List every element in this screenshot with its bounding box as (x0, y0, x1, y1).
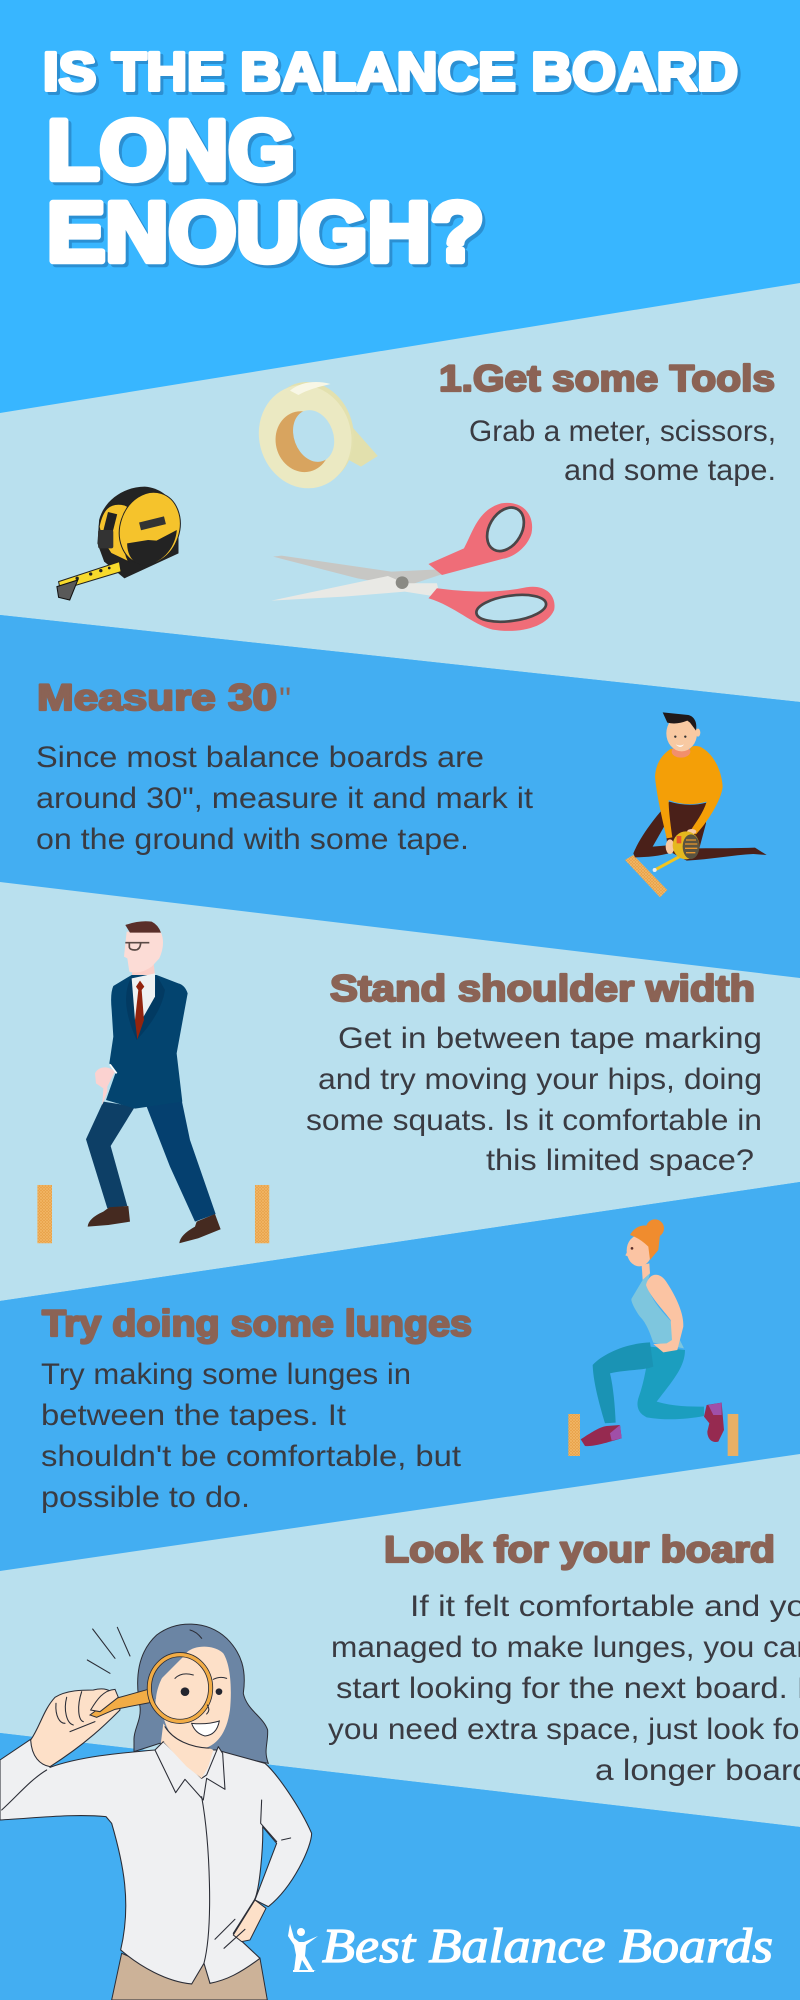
text: measure 30 (36, 741, 534, 856)
illustration: man measuring (625, 712, 767, 897)
text: get some tools: and some tape. (564, 454, 776, 487)
heading: get some tools: 1.Get some Tools (439, 358, 775, 399)
text: measure 30: on the ground with some tape. (36, 823, 469, 856)
panel: stand shoulder width (0, 882, 800, 1301)
illustration: woman with magnifying glass (0, 1624, 312, 2000)
text: try doing some lunges: shouldn't be comfortable, but (41, 1440, 462, 1473)
icon: tape measure (57, 484, 190, 600)
heading: measure 30: Measure 30 (37, 677, 277, 718)
heading: try doing some lunges: Try doing some lunges (42, 1303, 472, 1344)
text: stand shoulder width (306, 1022, 762, 1177)
text: stand shoulder width: some squats. Is it comfortable in (306, 1104, 762, 1137)
text: stand shoulder width: and try moving your hips, doing (318, 1063, 762, 1096)
text: try doing some lunges: possible to do. (41, 1481, 250, 1514)
heading: stand shoulder width: Stand shoulder width (330, 968, 755, 1009)
text: look for your board: you need extra space, just look for (328, 1713, 800, 1746)
text: look for your board: If it felt comfortable and you (410, 1590, 800, 1623)
icon: tape roll (248, 374, 378, 498)
text: look for your board: managed to make lunges, you can (331, 1631, 800, 1664)
heading: measure 30: " (279, 681, 291, 719)
text: look for your board (328, 1590, 800, 1787)
panel: measure 30 (0, 615, 800, 978)
text: look for your board: start looking for the next board. If (336, 1672, 800, 1705)
text: stand shoulder width: Get in between tape marking (338, 1022, 762, 1055)
text: look for your board: a longer board. (595, 1754, 800, 1787)
logo: Best Balance Boards: Best Balance Boards (322, 1918, 773, 1973)
text: try doing some lunges (41, 1358, 462, 1514)
text: try doing some lunges: between the tapes. It (41, 1399, 347, 1432)
panel: footer (0, 1733, 800, 2000)
title: ENOUGH? (47, 185, 484, 279)
panel: look for your board (0, 1454, 800, 1827)
panel: try doing some lunges (0, 1182, 800, 1571)
text: try doing some lunges: Try making some lunges in (41, 1358, 411, 1391)
panel: header (0, 0, 800, 420)
title: IS THE BALANCE BOARD (43, 42, 738, 102)
text: stand shoulder width: this limited space? (486, 1144, 754, 1177)
title: LONG (47, 103, 295, 197)
title (43, 42, 738, 279)
heading: look for your board: Look for your board (384, 1529, 775, 1570)
illustration: businessman between tapes (37, 921, 269, 1243)
text: get some tools (469, 415, 776, 487)
text: get some tools: Grab a meter, scissors, (469, 415, 776, 448)
panel: get some tools (0, 283, 800, 702)
text: measure 30: Since most balance boards are (36, 741, 484, 774)
illustration: woman doing a lunge (568, 1219, 738, 1456)
icon: scissors (271, 501, 555, 631)
text: measure 30: around 30", measure it and mark it (36, 782, 534, 815)
